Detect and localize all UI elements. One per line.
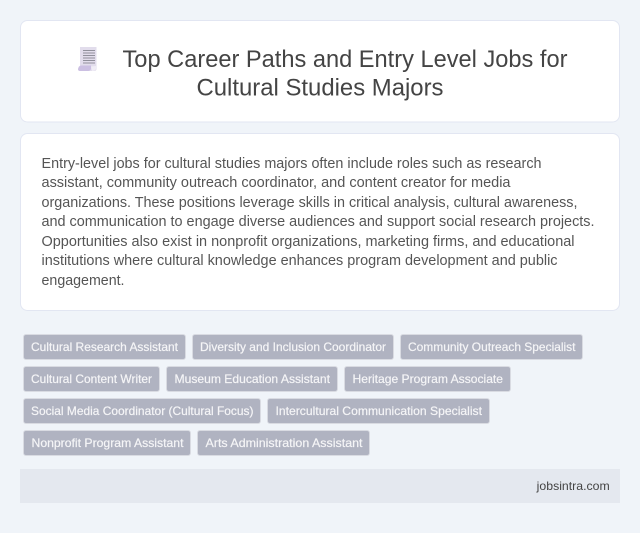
icon: document scroll (78, 47, 96, 71)
description text: institutions where cultural knowledge enhances program development and public (42, 253, 558, 269)
description text: Entry-level jobs for cultural studies majors often include roles such as research (42, 156, 542, 172)
tag: Heritage Program Associate (344, 366, 510, 392)
tag: Cultural Content Writer: Cultural Content Writer (31, 372, 152, 386)
title (122, 46, 568, 102)
job tags (24, 334, 582, 456)
description text (42, 156, 594, 289)
tag: Nonprofit Program Assistant (24, 430, 190, 456)
panel: header card (20, 20, 620, 122)
tag: Diversity and Inclusion Coordinator (192, 334, 394, 360)
tag: Intercultural Communication Specialist: Intercultural Communication Specialist (276, 404, 483, 418)
tag: Diversity and Inclusion Coordinator: Diversity and Inclusion Coordinator (200, 340, 386, 354)
tag: Cultural Research Assistant (24, 334, 186, 360)
tag: Arts Administration Assistant (198, 430, 370, 456)
tag: Museum Education Assistant: Museum Education Assistant (174, 372, 331, 386)
description text: engagement. (42, 273, 124, 289)
title: Top Career Paths and Entry Level Jobs for (122, 46, 568, 73)
tag: Intercultural Communication Specialist (268, 398, 490, 424)
description text: assistant, community outreach coordinator, and content creator for media (42, 175, 510, 191)
description text: and communication to engage diverse audiences and support social research projects. (42, 214, 594, 230)
panel: description card (20, 134, 620, 310)
tag: Heritage Program Associate: Heritage Program Associate (352, 372, 503, 386)
tag: Cultural Research Assistant: Cultural Research Assistant (31, 340, 179, 354)
footer source text: jobsintra.com (536, 479, 610, 493)
tag: Arts Administration Assistant: Arts Administration Assistant (206, 436, 363, 450)
description text: organizations. These positions leverage skills in critical analysis, cultural awareness, (42, 195, 578, 211)
tag: Community Outreach Specialist: Community Outreach Specialist (408, 340, 576, 354)
tag: Cultural Content Writer (24, 366, 160, 392)
tag: Museum Education Assistant (166, 366, 338, 392)
footer bar (20, 469, 620, 503)
tag: Social Media Coordinator (Cultural Focus) (24, 398, 260, 424)
tag: Nonprofit Program Assistant: Nonprofit Program Assistant (32, 436, 184, 450)
tag: Social Media Coordinator (Cultural Focus): Social Media Coordinator (Cultural Focus) (31, 404, 254, 418)
tag: Community Outreach Specialist (400, 334, 582, 360)
title: Cultural Studies Majors (196, 74, 444, 102)
description text: Opportunities also exist in nonprofit organizations, marketing firms, and educational (42, 234, 574, 250)
